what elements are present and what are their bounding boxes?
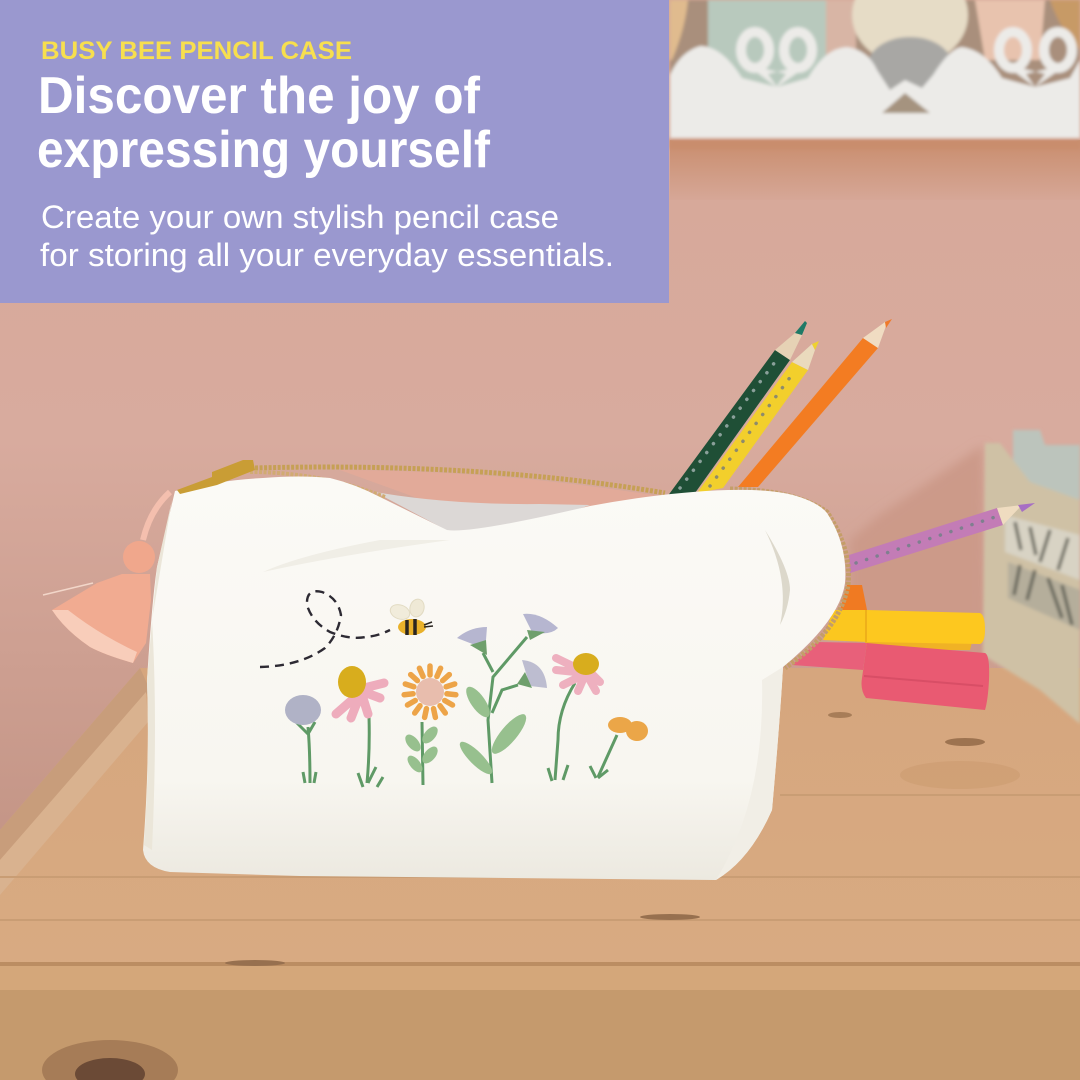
table surface	[0, 668, 1080, 1080]
panel: heading background	[0, 0, 669, 303]
pouch body	[143, 476, 845, 880]
marker: orange cap	[840, 585, 867, 610]
pencil: orange	[738, 319, 892, 487]
shelf with cut-outs	[670, 0, 1080, 149]
embroidery: leaves	[402, 683, 531, 778]
title line 1: Discover the joy of	[38, 67, 481, 125]
pouch fold shadows	[765, 530, 790, 625]
embroidery: pink flower with yellow centre	[336, 666, 384, 718]
body line 2: for storing all your everyday essentials.	[40, 237, 614, 273]
marker: pink	[792, 642, 989, 710]
zipper right	[730, 489, 849, 668]
zipper left	[255, 467, 665, 493]
shelf band	[670, 140, 1080, 200]
crate	[983, 430, 1080, 724]
pencil: yellow	[697, 341, 819, 493]
tassel	[43, 492, 170, 663]
embroidery: gray flower	[285, 695, 321, 725]
pencil: pink	[849, 503, 1035, 573]
pouch left panel shading	[144, 500, 172, 850]
embroidery: bee	[388, 597, 433, 635]
embroidery: orange cluster flower	[608, 717, 648, 741]
title line 2: expressing yourself	[37, 121, 491, 179]
pouch lining	[340, 470, 665, 510]
eyebrow label: BUSY BEE PENCIL CASE	[41, 37, 352, 65]
embroidery: orange flower	[404, 666, 456, 717]
pencil: green	[667, 321, 807, 497]
wall shadow behind crate	[850, 445, 985, 668]
embroidery: bee trail	[260, 591, 390, 667]
embroidery: pink flower right	[556, 653, 600, 691]
pouch	[43, 460, 849, 880]
embroidery: blue-gray blooms	[457, 614, 558, 688]
body line 1: Create your own stylish pencil case	[41, 199, 559, 235]
embroidery: stems	[296, 637, 617, 787]
zipper pull	[177, 460, 255, 494]
marker: yellow	[823, 610, 985, 650]
